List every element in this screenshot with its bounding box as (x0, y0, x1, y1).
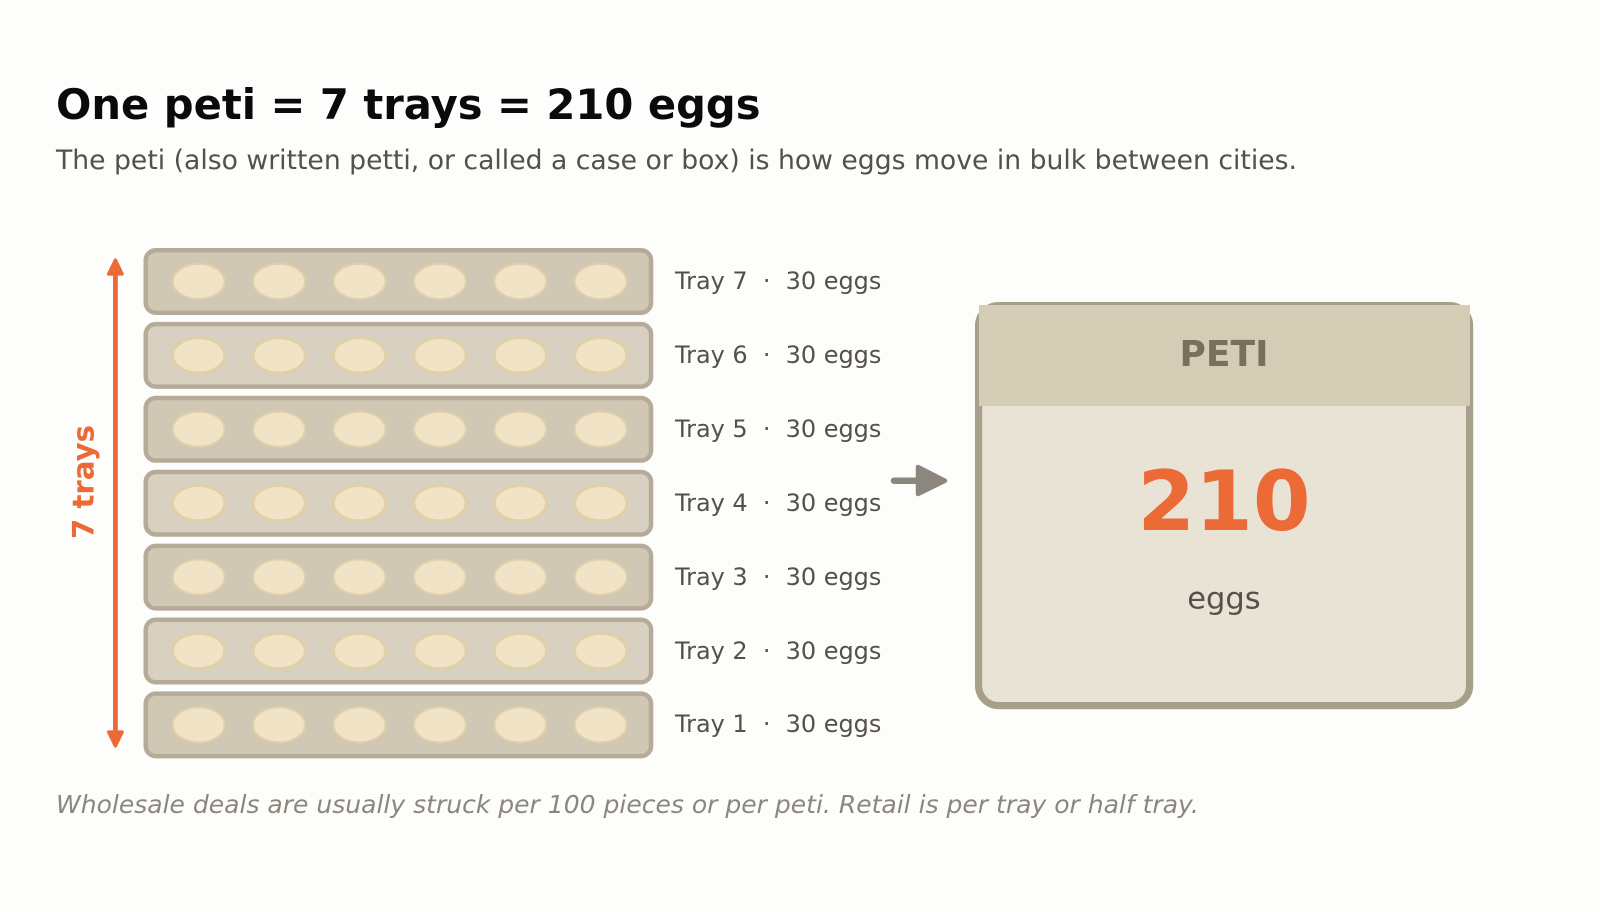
unit: eggs (1187, 582, 1261, 616)
arrow to peti box (894, 467, 945, 494)
tray 6 (146, 324, 881, 387)
tray 2: Tray 2 · 30 eggs (674, 637, 881, 665)
footnote: Wholesale deals are usually struck per 100 pieces or per peti. Retail is per tray or half tray. (56, 790, 1199, 819)
peti box (979, 305, 1470, 706)
height arrow: 7 trays (66, 260, 122, 746)
tray 3 (146, 546, 881, 608)
height arrow: 7 trays: 7 trays (66, 425, 100, 539)
tray stack (146, 250, 881, 756)
tray 1 (146, 694, 881, 756)
peti lid (979, 305, 1470, 406)
tray 2 (146, 620, 881, 682)
subtitle: The peti (also written petti, or called a case or box) is how eggs move in bulk between cities. (55, 145, 1297, 176)
egg count: 210 (1137, 453, 1311, 550)
tray 7 (146, 250, 881, 313)
title: One peti = 7 trays = 210 eggs (56, 80, 760, 129)
tray 3: Tray 3 · 30 eggs (674, 563, 881, 591)
tray 1: Tray 1 · 30 eggs (674, 710, 881, 738)
tray 6: Tray 6 · 30 eggs (674, 341, 881, 369)
lid label: PETI (1180, 334, 1268, 375)
tray 4: Tray 4 · 30 eggs (674, 489, 881, 517)
tray 7: Tray 7 · 30 eggs (674, 267, 881, 295)
tray 5 (146, 398, 881, 461)
tray 4 (146, 472, 881, 534)
tray 5: Tray 5 · 30 eggs (674, 415, 881, 443)
